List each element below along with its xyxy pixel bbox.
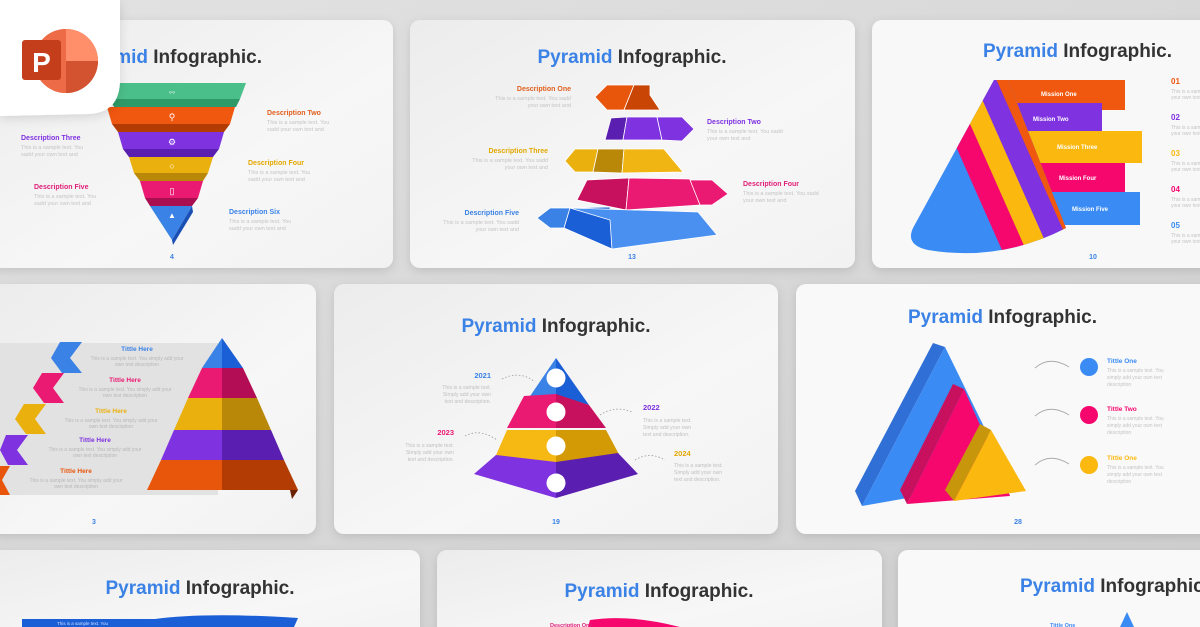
card 7: bottom left: This is a sample text. You	[57, 621, 109, 626]
card 2: stacked pyramid with tabs: This is a sample text. You sadd	[472, 158, 548, 164]
card 5: year pyramid: text and description.	[674, 477, 720, 483]
card 6: nested triangles: Tittle One	[1107, 455, 1137, 462]
card 4: ribbon pyramid: 3	[92, 519, 96, 526]
title card 2: Pyramid Infographic.	[538, 47, 726, 68]
card 4: ribbon pyramid: This is a sample text. You simply add your	[90, 356, 184, 362]
funnel pyramid: ▯	[170, 186, 175, 196]
card 3: cone with mission bars: 03	[1171, 149, 1180, 158]
layered pyramid	[537, 85, 728, 249]
card 1: inverted funnel pyramid: sadd your own text and	[34, 201, 91, 207]
powerpoint logo badge	[0, 0, 120, 116]
card 2: stacked pyramid with tabs: Description One	[517, 86, 571, 93]
funnel labels	[21, 110, 321, 216]
card 2: stacked pyramid with tabs: your own text and	[743, 198, 786, 204]
card 2: stacked pyramid with tabs: 13	[628, 254, 636, 261]
card 6: nested triangles: 28	[1014, 519, 1022, 526]
card 5: year pyramid: 19	[552, 519, 560, 526]
card 6: nested triangles: This is a sample text. You	[1107, 465, 1164, 471]
card 5: year pyramid: 2024	[674, 449, 692, 458]
mission bars: Mission Four	[1059, 176, 1097, 182]
card 4: ribbon pyramid: This is a sample text. You simply add your	[29, 478, 123, 484]
mission bars: Mission Two	[1033, 117, 1069, 123]
card 5: year pyramid	[334, 284, 778, 534]
card 4: ribbon pyramid: This is a sample text. You simply add your	[48, 447, 142, 453]
card 5: year pyramid: text and description.	[445, 399, 491, 405]
card 4: ribbon pyramid: Tittle Here	[79, 437, 111, 444]
card 6: nested triangles: description	[1107, 430, 1131, 436]
card 4: ribbon pyramid: Tittle Here	[121, 346, 153, 353]
card 5: year pyramid: 2023	[437, 428, 454, 437]
card 6: nested triangles: description	[1107, 479, 1131, 485]
card 2: stacked pyramid with tabs: This is a sample text. You sadd	[707, 129, 783, 135]
triangles	[855, 343, 1026, 506]
card 6: nested triangles: simply add your own text	[1107, 375, 1163, 381]
funnel labels: Description Four	[248, 160, 304, 167]
card 8: bottom middle	[437, 550, 882, 627]
card 2: stacked pyramid with tabs: your own text and	[505, 165, 548, 171]
stepped pyramid	[147, 338, 298, 499]
card 5: year pyramid: This is a sample text.	[405, 443, 454, 449]
card 2: stacked pyramid with tabs: your own text and	[528, 103, 571, 109]
icon: powerpoint: P	[32, 47, 51, 78]
card 3: cone with mission bars	[870, 20, 1200, 273]
card 4: ribbon pyramid: own text description	[115, 362, 159, 368]
card 1: inverted funnel pyramid	[0, 20, 393, 268]
mission bars	[995, 80, 1142, 225]
card 5: year pyramid: This is a sample text.	[643, 418, 692, 424]
card 2: stacked pyramid with tabs: This is a sample text. You sadd	[495, 96, 571, 102]
zigzag ribbons	[0, 342, 82, 495]
funnel pyramid: ⚙	[168, 137, 176, 147]
title card 7: Pyramid Infographic.	[106, 578, 294, 599]
card 2: stacked pyramid with tabs: Description Five	[465, 210, 519, 217]
card 1: inverted funnel pyramid: This is a sample text. You	[34, 194, 96, 200]
funnel labels: Description Two	[267, 110, 321, 117]
card 2: stacked pyramid with tabs: your own text and	[476, 227, 519, 233]
card 5: year pyramid: Simply add your own	[643, 425, 691, 431]
card 6: nested triangles: This is a sample text. You	[1107, 368, 1164, 374]
card 5: year pyramid: This is a sample text.	[442, 385, 491, 391]
card 5: year pyramid: 2021	[474, 371, 491, 380]
cone	[910, 80, 1066, 254]
funnel labels: Description Three	[21, 135, 81, 142]
card 2: stacked pyramid with tabs: Description Two	[707, 119, 761, 126]
title card 5: Pyramid Infographic.	[462, 316, 650, 337]
funnel pyramid	[104, 83, 246, 245]
card 3: cone with mission bars: your own text	[1171, 131, 1200, 137]
card 3: cone with mission bars: 04	[1171, 185, 1180, 194]
card 5: year pyramid: Simply add your own	[674, 470, 722, 476]
card 1: inverted funnel pyramid: This is a sample text. You	[229, 219, 291, 225]
card 3: cone with mission bars: 05	[1171, 221, 1180, 230]
funnel pyramid: ⚲	[169, 112, 175, 122]
card 2: stacked pyramid with tabs: Description Three	[488, 148, 548, 155]
card 6: nested triangles: This is a sample text. You	[1107, 416, 1164, 422]
card 1: inverted funnel pyramid: sadd your own text and	[21, 152, 78, 158]
card 2: stacked pyramid with tabs	[410, 20, 855, 268]
funnel labels: Description Six	[229, 209, 280, 216]
mission bars: Mission One	[1041, 92, 1077, 98]
card 5: year pyramid: text and description.	[643, 432, 689, 438]
card 4: ribbon pyramid: Tittle Here	[95, 408, 127, 415]
card 1: inverted funnel pyramid: sadd your own text and	[229, 226, 286, 232]
card 3: cone with mission bars: your own text	[1171, 167, 1200, 173]
card 9: bottom right	[898, 550, 1200, 627]
title card 1: Pyramid Infographic.	[73, 47, 262, 68]
funnel pyramid: ◦◦	[169, 87, 175, 97]
funnel pyramid: ○	[169, 161, 175, 171]
card 2: stacked pyramid with tabs: your own text and	[707, 136, 750, 142]
card 3: cone with mission bars: your own text	[1171, 239, 1200, 245]
title card 6: Pyramid Infographic.	[908, 307, 1097, 328]
card 1: inverted funnel pyramid: sadd your own text and	[267, 127, 324, 133]
card 6: nested triangles: Tittle Two	[1107, 406, 1137, 413]
card 5: year pyramid: This is a sample text.	[674, 463, 723, 469]
card 7: bottom left	[0, 550, 420, 627]
card 6: nested triangles	[796, 284, 1200, 534]
card 2: stacked pyramid with tabs: This is a sample text. You sadd	[743, 191, 819, 197]
card 6: nested triangles: description	[1107, 382, 1131, 388]
card 3: cone with mission bars: 02	[1171, 113, 1180, 122]
card 6: nested triangles: Tittle One	[1107, 358, 1137, 365]
card 4: ribbon pyramid: Tittle Here	[60, 468, 92, 475]
partial title card 4: c.	[0, 357, 16, 378]
card 2: stacked pyramid with tabs: Description Four	[743, 181, 799, 188]
card 4: ribbon pyramid: Tittle Here	[109, 377, 141, 384]
card 4: ribbon pyramid: own text description	[103, 393, 147, 399]
funnel pyramid: ▲	[168, 211, 176, 220]
funnel labels: Description Five	[34, 184, 89, 191]
card 1: inverted funnel pyramid: sadd your own text and	[248, 177, 305, 183]
card 1: inverted funnel pyramid: This is a sample text. You	[21, 145, 83, 151]
title card 8: Pyramid Infographic.	[565, 581, 753, 602]
pyramid layers	[474, 358, 638, 498]
card 4: ribbon pyramid: This is a sample text. You simply add your	[64, 418, 158, 424]
card 3: cone with mission bars: your own text	[1171, 203, 1200, 209]
card 6: nested triangles: simply add your own text	[1107, 472, 1163, 478]
card 1: inverted funnel pyramid: This is a sample text. You	[267, 120, 329, 126]
card 5: year pyramid: Simply add your own	[406, 450, 454, 456]
card 4: ribbon pyramid: own text description	[89, 424, 133, 430]
card 2: stacked pyramid with tabs: This is a sample text. You sadd	[443, 220, 519, 226]
mission bars: Mission Five	[1072, 207, 1109, 213]
mission bars: Mission Three	[1057, 145, 1098, 151]
card 3: cone with mission bars: 10	[1089, 254, 1097, 261]
card 1: inverted funnel pyramid: This is a sample text. You	[248, 170, 310, 176]
card 4: ribbon pyramid: This is a sample text. You simply add your	[78, 387, 172, 393]
card 1: inverted funnel pyramid: 4	[170, 254, 174, 261]
card 3: cone with mission bars: your own text	[1171, 95, 1200, 101]
card 5: year pyramid: Simply add your own	[443, 392, 491, 398]
card 6: nested triangles: simply add your own text	[1107, 423, 1163, 429]
card 5: year pyramid: text and description.	[408, 457, 454, 463]
card 5: year pyramid: 2022	[643, 403, 660, 412]
title card 3: Pyramid Infographic.	[983, 41, 1172, 62]
card 4: ribbon pyramid	[0, 284, 316, 534]
card 4: ribbon pyramid: own text description	[54, 484, 98, 490]
card 3: cone with mission bars: 01	[1171, 77, 1180, 86]
card 4: ribbon pyramid: own text description	[73, 453, 117, 459]
